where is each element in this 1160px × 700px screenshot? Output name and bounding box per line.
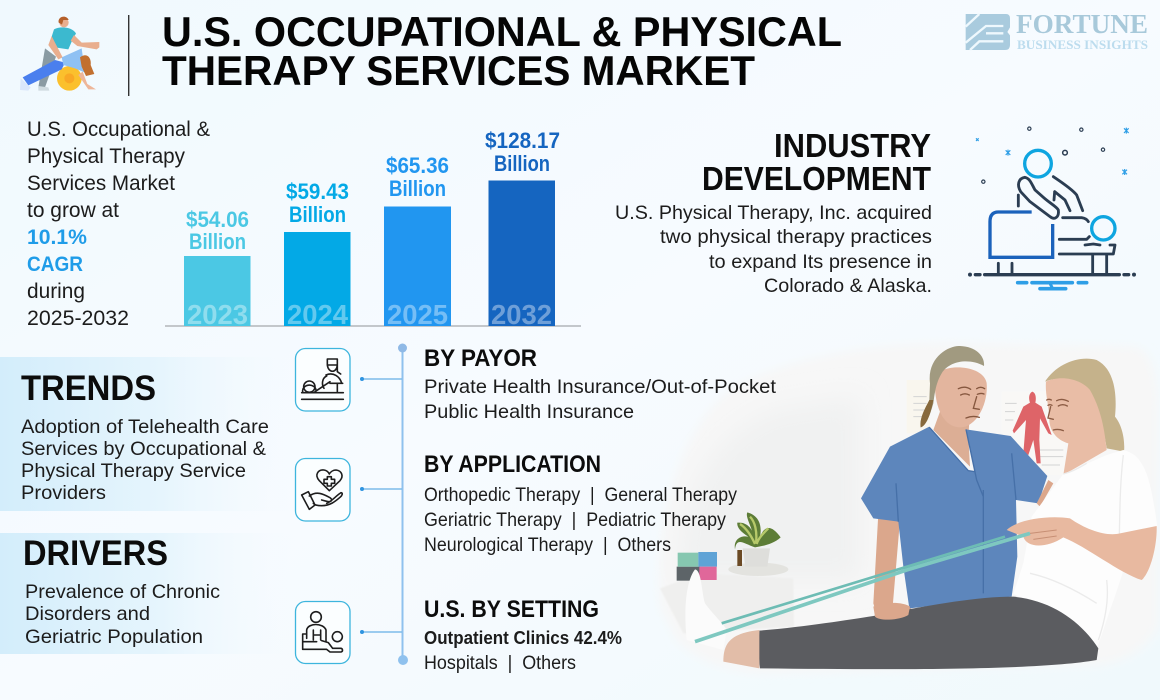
- bar 2032: 2032: [491, 299, 552, 330]
- text block: industry development detail: U.S. Physical Therapy, Inc. acquired: [615, 202, 932, 224]
- panel: trends: [0, 357, 295, 511]
- bar 2025: [384, 153, 451, 330]
- patient shin and foot: [723, 630, 759, 668]
- patient legs: [759, 597, 1098, 669]
- therapist neck: [933, 412, 970, 467]
- panel: trends: TRENDS: [21, 369, 156, 408]
- icon: by setting therapist and patient: [296, 602, 350, 664]
- text block: industry development detail: [615, 202, 932, 297]
- panel: drivers: Prevalence of Chronic: [25, 581, 220, 603]
- text block: CAGR statement: Physical Therapy: [27, 145, 185, 168]
- icon: by application heart in hand: [296, 458, 350, 521]
- therapist hair: [921, 346, 984, 427]
- bar 2032: [485, 128, 560, 330]
- posters: [907, 380, 930, 433]
- bar 2025: Billion: [389, 176, 446, 201]
- wall shading: [680, 397, 860, 580]
- icon: therapist massaging patient: [968, 127, 1136, 289]
- bar 2025: $65.36: [386, 153, 449, 178]
- segment: by payor: Public Health Insurance: [424, 401, 634, 423]
- segment: by payor: [424, 345, 777, 423]
- segment: by application: Geriatric Therapy | Pediatric Therapy: [424, 509, 726, 531]
- panel: trends: Services by Occupational &: [21, 438, 266, 460]
- logo: Fortune Business Insights: BUSINESS INSIGHTS: [1017, 37, 1148, 52]
- bar 2023: Billion: [189, 229, 246, 254]
- segment: U.S. by setting: [424, 596, 622, 674]
- timeline connector: [360, 344, 408, 665]
- text block: CAGR statement: to grow at: [27, 199, 119, 222]
- segment: U.S. by setting: U.S. BY SETTING: [424, 596, 599, 623]
- bar 2032: Billion: [494, 151, 550, 176]
- heading: industry development: [702, 127, 931, 197]
- logo: Fortune Business Insights: [966, 9, 1148, 52]
- text block: industry development detail: two physical therapy practices: [660, 226, 932, 248]
- text block: CAGR statement: Services Market: [27, 172, 175, 195]
- patient face and neck: [1046, 378, 1107, 475]
- panel: trends: Providers: [21, 482, 106, 504]
- bar 2023: 2023: [187, 299, 248, 330]
- therapist hand on knee: [873, 603, 910, 620]
- icon: therapist and patient on ball: [20, 17, 99, 91]
- bar 2024: Billion: [289, 202, 346, 227]
- title: THERAPY SERVICES MARKET: [162, 47, 755, 94]
- segment: by payor: BY PAYOR: [424, 345, 537, 372]
- segment: by payor: Private Health Insurance/Out-of-Pocket: [424, 376, 777, 398]
- segment: U.S. by setting: Hospitals | Others: [424, 652, 576, 674]
- header divider: [128, 15, 129, 96]
- icon: by payor therapist: [296, 348, 350, 411]
- text block: industry development detail: to expand Its presence in: [709, 251, 932, 273]
- patient t-shirt: [1013, 450, 1157, 647]
- cabinet and objects: [660, 512, 794, 633]
- text block: CAGR statement: U.S. Occupational &: [27, 118, 210, 141]
- therapist scrubs: [861, 427, 1047, 608]
- bar 2025: 2025: [387, 299, 448, 330]
- bar 2024: 2024: [287, 299, 348, 330]
- bar 2024: $59.43: [286, 179, 349, 204]
- panel: drivers: Geriatric Population: [25, 626, 203, 648]
- title: U.S. OCCUPATIONAL & PHYSICAL: [162, 8, 842, 55]
- panel: drivers: DRIVERS: [23, 534, 168, 573]
- patient hair: [1045, 359, 1124, 452]
- text block: industry development detail: Colorado & Alaska.: [764, 275, 932, 297]
- therapist arm and hand: [873, 513, 912, 619]
- panel: trends: Physical Therapy Service: [21, 460, 246, 482]
- bar 2024: [284, 179, 350, 330]
- text block: CAGR statement: 2025-2032: [27, 307, 129, 330]
- panel: drivers: [0, 533, 295, 654]
- photo: therapist with patient using resistance band: [659, 343, 1158, 673]
- heading: industry development: DEVELOPMENT: [702, 160, 931, 197]
- segment: by application: Neurological Therapy | Others: [424, 534, 671, 556]
- text block: CAGR statement: during: [27, 280, 85, 303]
- segment: by application: Orthopedic Therapy | General Therapy: [424, 484, 737, 506]
- panel: drivers: Disorders and: [25, 603, 150, 625]
- panel: trends: Adoption of Telehealth Care: [21, 416, 269, 438]
- segment: U.S. by setting: Outpatient Clinics 42.4%: [424, 628, 622, 648]
- therapist face: [935, 367, 987, 427]
- resistance band: [695, 533, 1030, 642]
- text block: CAGR statement: 10.1%: [27, 226, 87, 249]
- bar 2032: $128.17: [485, 128, 560, 153]
- title: [162, 8, 842, 94]
- therapist far hand: [1037, 480, 1053, 507]
- text block: CAGR statement: CAGR: [27, 253, 83, 276]
- heading: industry development: INDUSTRY: [774, 127, 931, 164]
- text block: CAGR statement: [27, 118, 210, 330]
- bar 2023: $54.06: [186, 207, 249, 232]
- bar 2023: [184, 207, 250, 330]
- patient arm: [1007, 517, 1157, 580]
- bar chart: market size: [165, 128, 581, 330]
- segment: by application: [424, 451, 737, 556]
- logo: Fortune Business Insights: FORTUNE: [1016, 9, 1148, 39]
- segment: by application: BY APPLICATION: [424, 451, 601, 478]
